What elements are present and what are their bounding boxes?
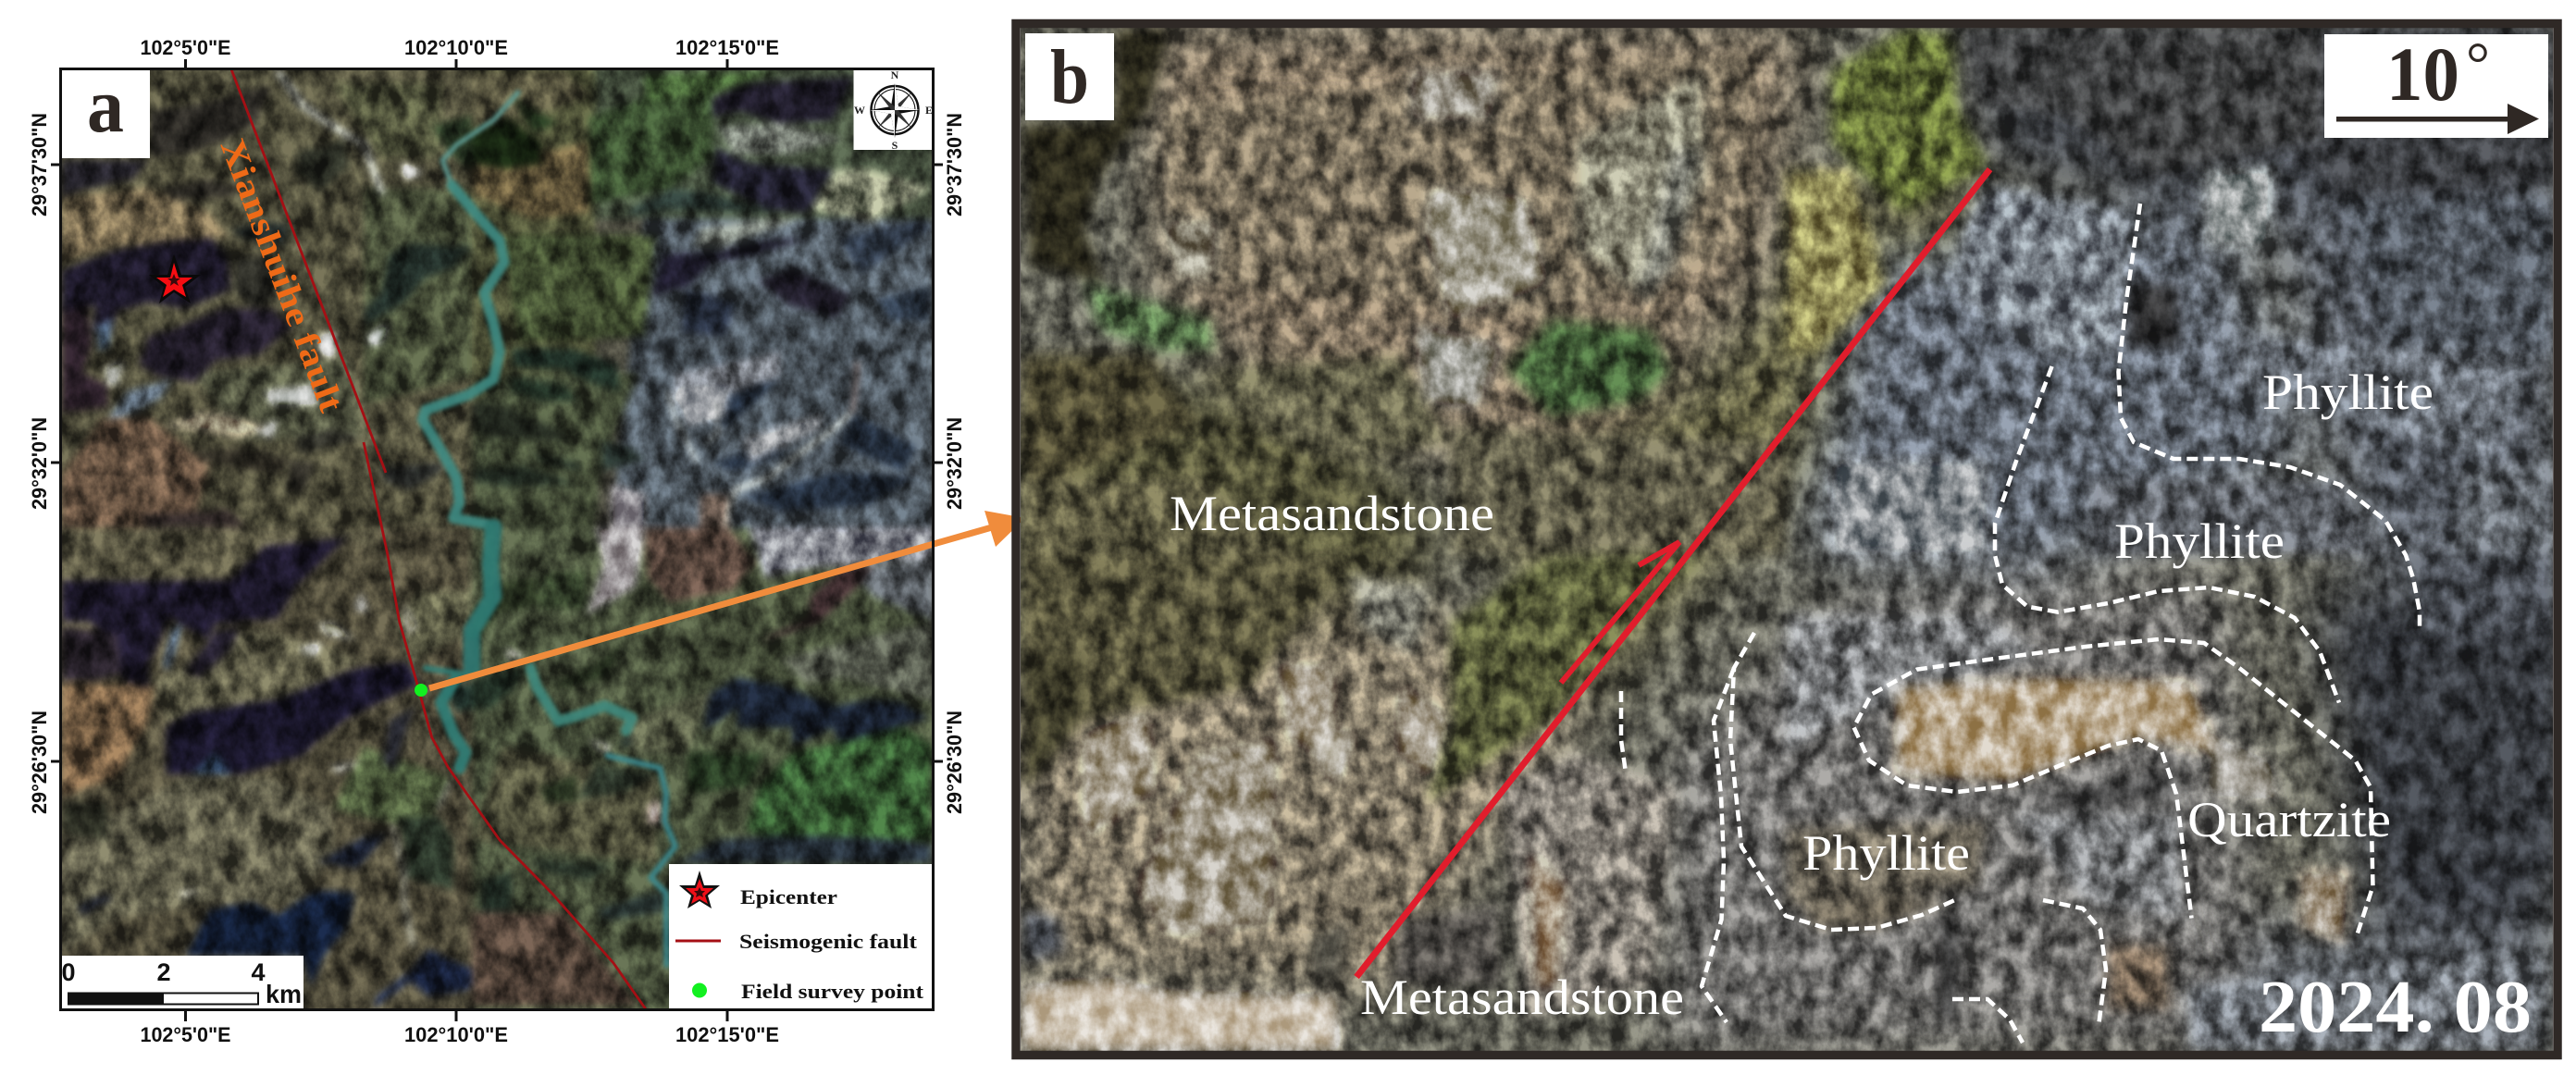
legend epicenter symbol	[679, 871, 720, 908]
legend: Seismogenic fault	[739, 930, 918, 953]
red fault line	[1356, 169, 1990, 977]
latitude labels left	[28, 113, 51, 814]
scale bar: 4	[251, 958, 266, 986]
rock labels: Phyllite	[2114, 513, 2285, 569]
photo frame	[1016, 24, 2557, 1055]
white dashed contact lines	[1621, 204, 2420, 1043]
field survey point	[415, 684, 427, 697]
latitude labels left: 29°32'0"N	[28, 417, 51, 510]
latitude labels left: 29°26'30"N	[28, 710, 51, 814]
label box b	[1025, 33, 1114, 120]
legend	[669, 864, 934, 1010]
river	[423, 93, 675, 965]
longitude labels top: 102°5'0"E	[141, 36, 231, 59]
longitude labels top: 102°10'0"E	[404, 36, 508, 59]
latitude labels right: 29°32'0"N	[943, 417, 966, 510]
latitude labels right	[943, 113, 966, 814]
rock labels: Phyllite	[1802, 825, 1970, 881]
epicenter star	[149, 254, 201, 303]
latitude labels left: 29°37'30"N	[28, 113, 51, 216]
longitude labels bottom: 102°15'0"E	[675, 1023, 779, 1046]
fault label on map: Xianshuihe fault	[213, 133, 351, 417]
rock labels: Metasandstone	[1170, 486, 1494, 541]
rock labels: Quartzite	[2187, 792, 2391, 847]
compass rose: N	[891, 68, 899, 81]
label box a	[60, 63, 150, 158]
longitude labels bottom: 102°5'0"E	[141, 1023, 231, 1046]
compass rose: E	[925, 104, 933, 117]
date stamp: 2024. 08	[2259, 967, 2532, 1048]
longitude labels bottom: 102°10'0"E	[404, 1023, 508, 1046]
latitude labels right: 29°37'30"N	[943, 113, 966, 216]
outcrop photo	[1021, 28, 2567, 1051]
latitude labels right: 29°26'30"N	[943, 710, 966, 814]
red slip arrow	[1561, 542, 1679, 683]
north arrow box 10 degrees	[2324, 31, 2548, 138]
scale bar: km	[266, 980, 302, 1008]
legend: Epicenter	[740, 885, 837, 908]
compass rose: S	[892, 139, 898, 152]
longitude labels top: 102°15'0"E	[675, 36, 779, 59]
map frame and ticks	[51, 59, 943, 1021]
scale bar	[60, 956, 303, 1010]
rock labels	[1170, 365, 2434, 1025]
north arrow box 10 degrees: °	[2466, 31, 2490, 98]
label box b: b	[1050, 34, 1089, 120]
scale bar: 2	[156, 958, 171, 986]
panel a: satellite map	[28, 36, 1025, 1046]
panel b: outcrop photograph	[1016, 24, 2567, 1055]
compass rose: W	[854, 104, 865, 117]
scale bar: 0	[61, 958, 76, 986]
compass rose	[853, 68, 934, 152]
satellite image	[56, 65, 935, 1018]
label box a: a	[87, 63, 124, 149]
longitude labels bottom	[141, 1023, 779, 1046]
orange arrow to photograph	[429, 511, 1025, 688]
rock labels: Phyllite	[2262, 365, 2434, 420]
seismogenic fault line	[231, 69, 646, 1009]
rock labels: Metasandstone	[1360, 970, 1684, 1025]
legend: Field survey point	[741, 980, 924, 1003]
north arrow box 10 degrees: 10	[2386, 31, 2459, 117]
longitude labels top	[141, 36, 779, 59]
